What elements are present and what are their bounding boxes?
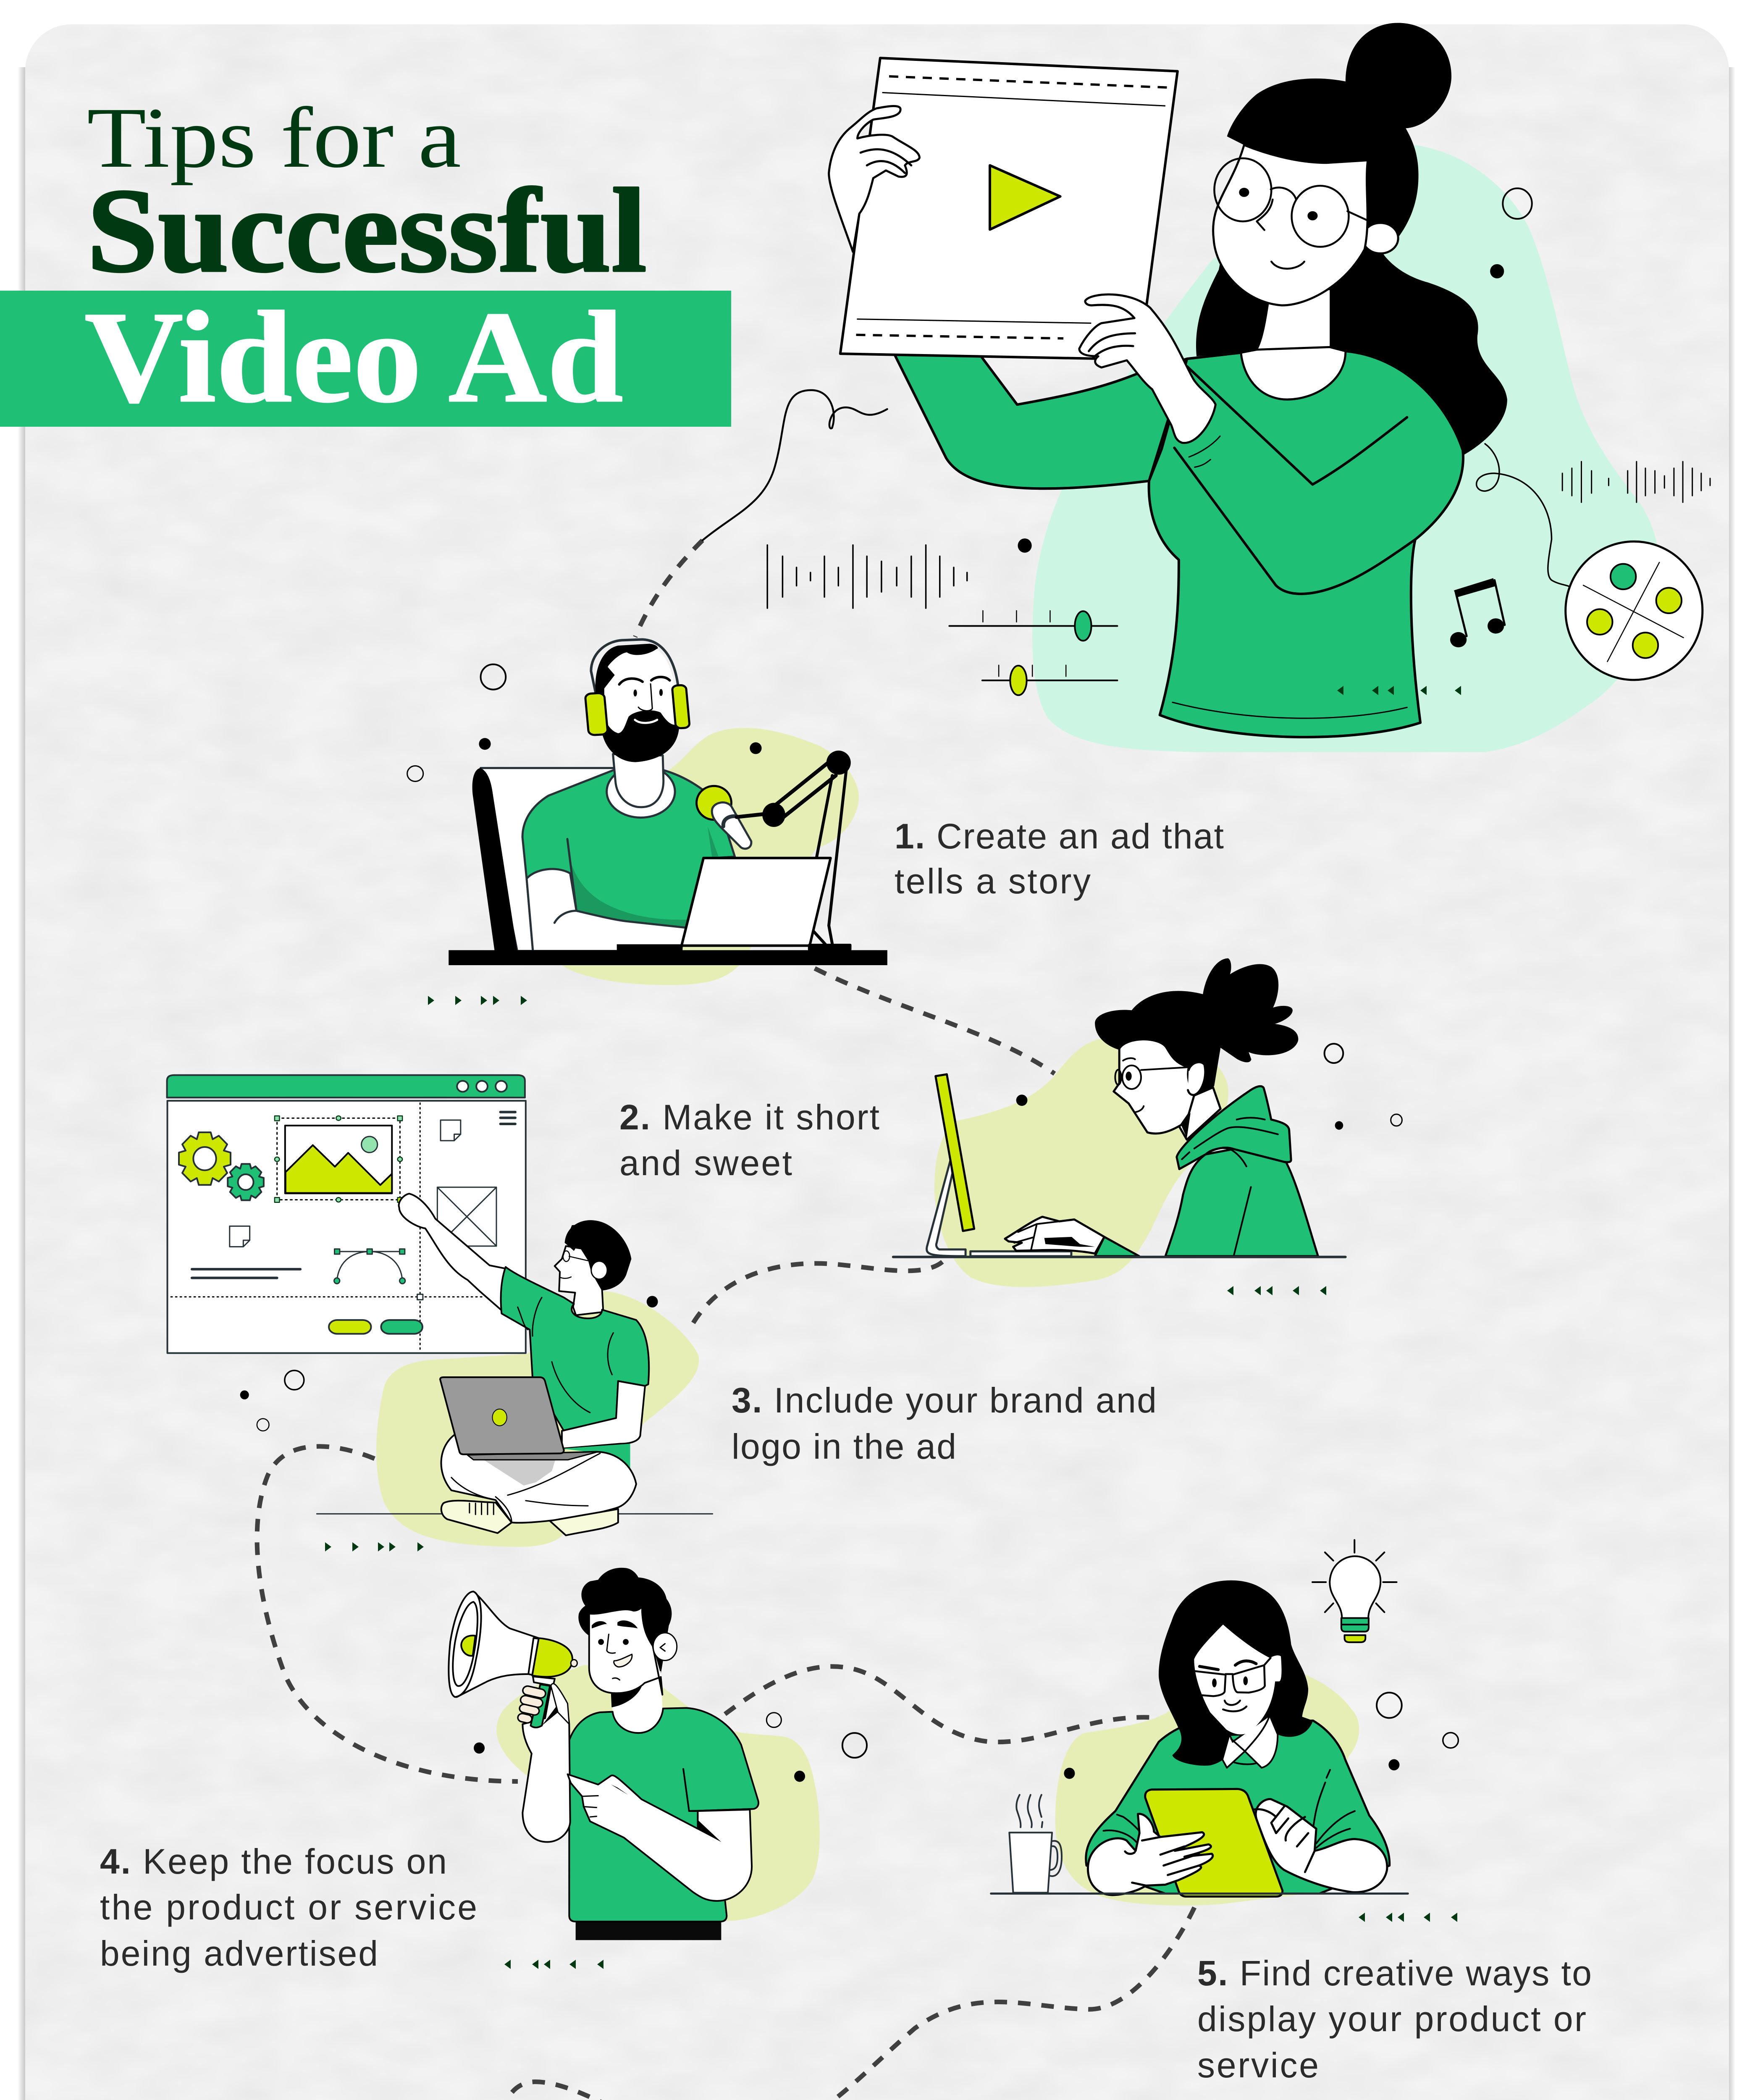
lime blob (496, 1665, 820, 1921)
tip 5 text: 5. Find creative ways to (1197, 1953, 1592, 1993)
button green (381, 1320, 422, 1334)
sweater folds (1104, 1770, 1355, 1848)
green sweater (1086, 1721, 1390, 1893)
tip 3 text (732, 1381, 1157, 1466)
small direction arrows (325, 686, 1525, 2100)
arm detail (554, 839, 577, 923)
tip 3 text: logo in the ad (732, 1427, 956, 1466)
title (0, 89, 731, 430)
ear (653, 1633, 677, 1661)
crossed legs (441, 1434, 636, 1523)
face (1114, 1040, 1194, 1134)
ring (481, 664, 506, 690)
image placeholder (285, 1126, 392, 1193)
curly solid cable (703, 390, 887, 540)
facial features (619, 677, 670, 723)
green t-shirt (569, 1708, 758, 1922)
hem (1173, 436, 1407, 718)
glasses and face details (1115, 1058, 1187, 1112)
text lines (192, 1269, 300, 1278)
glasses (1214, 158, 1370, 269)
title banner (0, 291, 731, 427)
face (589, 1606, 662, 1695)
hair (578, 1568, 672, 1674)
hair (1095, 958, 1298, 1095)
tip 4 text: being advertised (100, 1934, 378, 1973)
right fingers (1254, 1807, 1314, 1872)
pants shadow and lines (483, 1458, 556, 1486)
left shoe (441, 1501, 512, 1533)
fringe (565, 1223, 594, 1260)
microphone (697, 786, 751, 849)
hair (1196, 23, 1507, 455)
tip 5 text: service (1197, 2045, 1319, 2085)
thumb shadow (542, 1705, 558, 1726)
stripe (528, 1638, 539, 1675)
table line (991, 1893, 1408, 1895)
speaker disc (1566, 541, 1703, 680)
play icon (990, 165, 1060, 229)
face details (1199, 1661, 1256, 1712)
guide handle (417, 1294, 423, 1300)
left laces (470, 1503, 493, 1515)
steam (1016, 1795, 1042, 1827)
ear (1188, 1062, 1205, 1095)
tip 5 text: display your product or (1197, 1999, 1586, 2039)
neck (1174, 1087, 1220, 1139)
ring (257, 1419, 269, 1431)
illustration: woman typing at computer (893, 958, 1402, 1287)
neck shadow (1181, 1113, 1191, 1138)
ring (1443, 1732, 1458, 1748)
laptop base (467, 1452, 598, 1460)
hood (1177, 1086, 1291, 1169)
green t-shirt (522, 769, 735, 951)
ring (285, 1370, 304, 1390)
solid cable to speaker (1477, 444, 1569, 586)
face (1194, 1625, 1282, 1734)
video page (840, 58, 1178, 359)
glasses (1195, 1658, 1271, 1696)
left arm and hand (1088, 1814, 1213, 1895)
laptop logo (492, 1409, 507, 1426)
desk (449, 944, 887, 965)
tip 2 text (619, 1097, 879, 1183)
dot (647, 1296, 658, 1307)
dot (1016, 1095, 1027, 1106)
monitor screen (936, 1074, 974, 1231)
sweater creases (1174, 366, 1415, 594)
shirt shading (569, 827, 719, 928)
ring (842, 1733, 867, 1758)
green hoodie body (1165, 1149, 1318, 1256)
illustration: woman with tablet (991, 1540, 1458, 1906)
handle (533, 1676, 555, 1686)
illustration: woman holding video page (767, 23, 1710, 752)
ear (1363, 223, 1398, 253)
music note (1450, 578, 1505, 647)
ear cups (585, 685, 690, 735)
dot (1490, 264, 1504, 278)
sound wave left (767, 545, 967, 608)
left hand (829, 106, 919, 252)
right arm and hand (1256, 1799, 1387, 1892)
megaphone lime body (532, 1638, 572, 1677)
right hand and forearm (1079, 294, 1215, 443)
hair (1159, 1580, 1313, 1766)
beard (601, 710, 679, 762)
eyes (1239, 188, 1249, 197)
megaphone (449, 1591, 577, 1727)
lime blob (1055, 1672, 1359, 1906)
hands (1005, 1217, 1104, 1253)
hamburger menu (501, 1112, 515, 1124)
dot (240, 1390, 249, 1399)
ring (1391, 1114, 1402, 1126)
ear (591, 1261, 607, 1279)
dot (479, 738, 491, 750)
browser body (168, 1101, 526, 1353)
green t-shirt (501, 1267, 649, 1431)
ring (1503, 188, 1532, 219)
lime blob (562, 728, 859, 985)
ring (407, 766, 423, 781)
buttons (329, 1320, 371, 1334)
left sleeve (894, 354, 1187, 488)
page rules (856, 76, 1168, 339)
light bulb (1312, 1540, 1397, 1642)
dot (794, 1771, 805, 1782)
megaphone inner rim (453, 1602, 478, 1686)
title line: Video Ad: Video Ad (84, 285, 623, 430)
ring (1325, 1044, 1343, 1063)
mic boom arm (737, 751, 851, 944)
mint blob (1032, 145, 1658, 752)
selection box (277, 1118, 400, 1200)
chair back (481, 768, 622, 951)
coffee mug (1009, 1795, 1062, 1893)
hoodie lines (1182, 1118, 1278, 1256)
dot (1018, 538, 1032, 553)
tip 1 text: 1. Create an ad that (895, 816, 1224, 856)
monitor stand (927, 1160, 966, 1256)
selection handles (275, 1116, 402, 1202)
table line (893, 1256, 1346, 1258)
t-shirt creases (518, 1297, 613, 1412)
glasses (561, 1251, 590, 1278)
chair side (472, 768, 517, 951)
tablet (1145, 1789, 1283, 1896)
tip 1 text (895, 816, 1224, 901)
neck (613, 754, 664, 807)
tip 2 text: 2. Make it short (619, 1097, 879, 1137)
megaphone rim (449, 1591, 481, 1697)
ring (766, 1713, 781, 1727)
arm (527, 869, 686, 951)
tip 4 text: 4. Keep the focus on (100, 1842, 447, 1881)
neck (1257, 290, 1330, 351)
ring (1377, 1693, 1402, 1718)
neck (611, 1671, 662, 1733)
tip 4 text (100, 1842, 477, 1973)
handle grip (531, 1684, 550, 1727)
left fingers (1125, 1837, 1199, 1886)
speaker center (461, 1635, 475, 1656)
neckline (1241, 347, 1346, 399)
tip 1 text: tells a story (895, 861, 1091, 901)
dot (1064, 1768, 1075, 1779)
bezier tool (334, 1249, 405, 1284)
laptop lid (440, 1377, 564, 1454)
sleeve line (683, 1769, 753, 1811)
leg creases (451, 1453, 600, 1522)
tip 3 text: 3. Include your brand and (732, 1381, 1157, 1420)
title line: Tips for a: Tips for a (87, 89, 461, 186)
guides (171, 1103, 483, 1351)
title line: Successful: Successful (87, 164, 647, 297)
holding arm (522, 1683, 570, 1842)
dot (474, 1743, 485, 1754)
ground line (317, 1513, 713, 1515)
illustration: podcaster at desk (407, 639, 887, 985)
small gear (228, 1164, 264, 1200)
face details (592, 1620, 665, 1680)
laptop (682, 858, 831, 945)
headband (591, 639, 678, 693)
collar lines (1231, 1715, 1270, 1764)
document icon top (441, 1120, 461, 1141)
document icon left (230, 1226, 250, 1247)
arm shadow (611, 1785, 721, 1842)
shirt collar (1223, 1715, 1278, 1768)
hair (565, 1220, 631, 1290)
tip 4 text: the product or service (100, 1887, 477, 1927)
dashed connector paths (257, 540, 1729, 2100)
sleeve cuff (1095, 1237, 1139, 1256)
neck shadow (611, 1685, 642, 1707)
face and neck (555, 1246, 603, 1315)
dot (750, 742, 762, 754)
fingers (517, 1685, 546, 1724)
window buttons (457, 1081, 507, 1092)
hair (596, 644, 658, 695)
tip 2 text: and sweet (619, 1143, 792, 1183)
right shoe (550, 1509, 618, 1536)
thumb (551, 1684, 569, 1724)
large gear (179, 1132, 231, 1185)
face (1213, 145, 1368, 305)
finger lines (1014, 1221, 1059, 1250)
pointing arm (568, 1774, 752, 1901)
button (571, 1659, 577, 1667)
torso (1149, 351, 1463, 737)
raised arm (399, 1194, 506, 1310)
collar (607, 766, 675, 818)
illustration: man with megaphone (449, 1568, 867, 1940)
pants (576, 1920, 721, 1940)
forearm (562, 1381, 645, 1449)
finger lines (582, 1796, 598, 1817)
sound wave right (1562, 462, 1710, 502)
lime blob (934, 1039, 1228, 1287)
shirt under laptop (562, 1444, 630, 1468)
keyboard (971, 1251, 1071, 1256)
crossed placeholder (437, 1187, 496, 1246)
palm shadow (1044, 1237, 1095, 1247)
lime blob (376, 1291, 699, 1547)
face (604, 649, 679, 734)
slider top (949, 611, 1117, 641)
browser title bar (167, 1075, 525, 1097)
megaphone cone (457, 1591, 539, 1697)
dot (1335, 1121, 1343, 1130)
dot (1388, 1759, 1399, 1770)
slider bottom (982, 665, 1117, 695)
tip 5 text (1197, 1953, 1592, 2085)
illustration: designer with browser window and laptop (167, 1075, 713, 1547)
browser window (167, 1075, 526, 1353)
